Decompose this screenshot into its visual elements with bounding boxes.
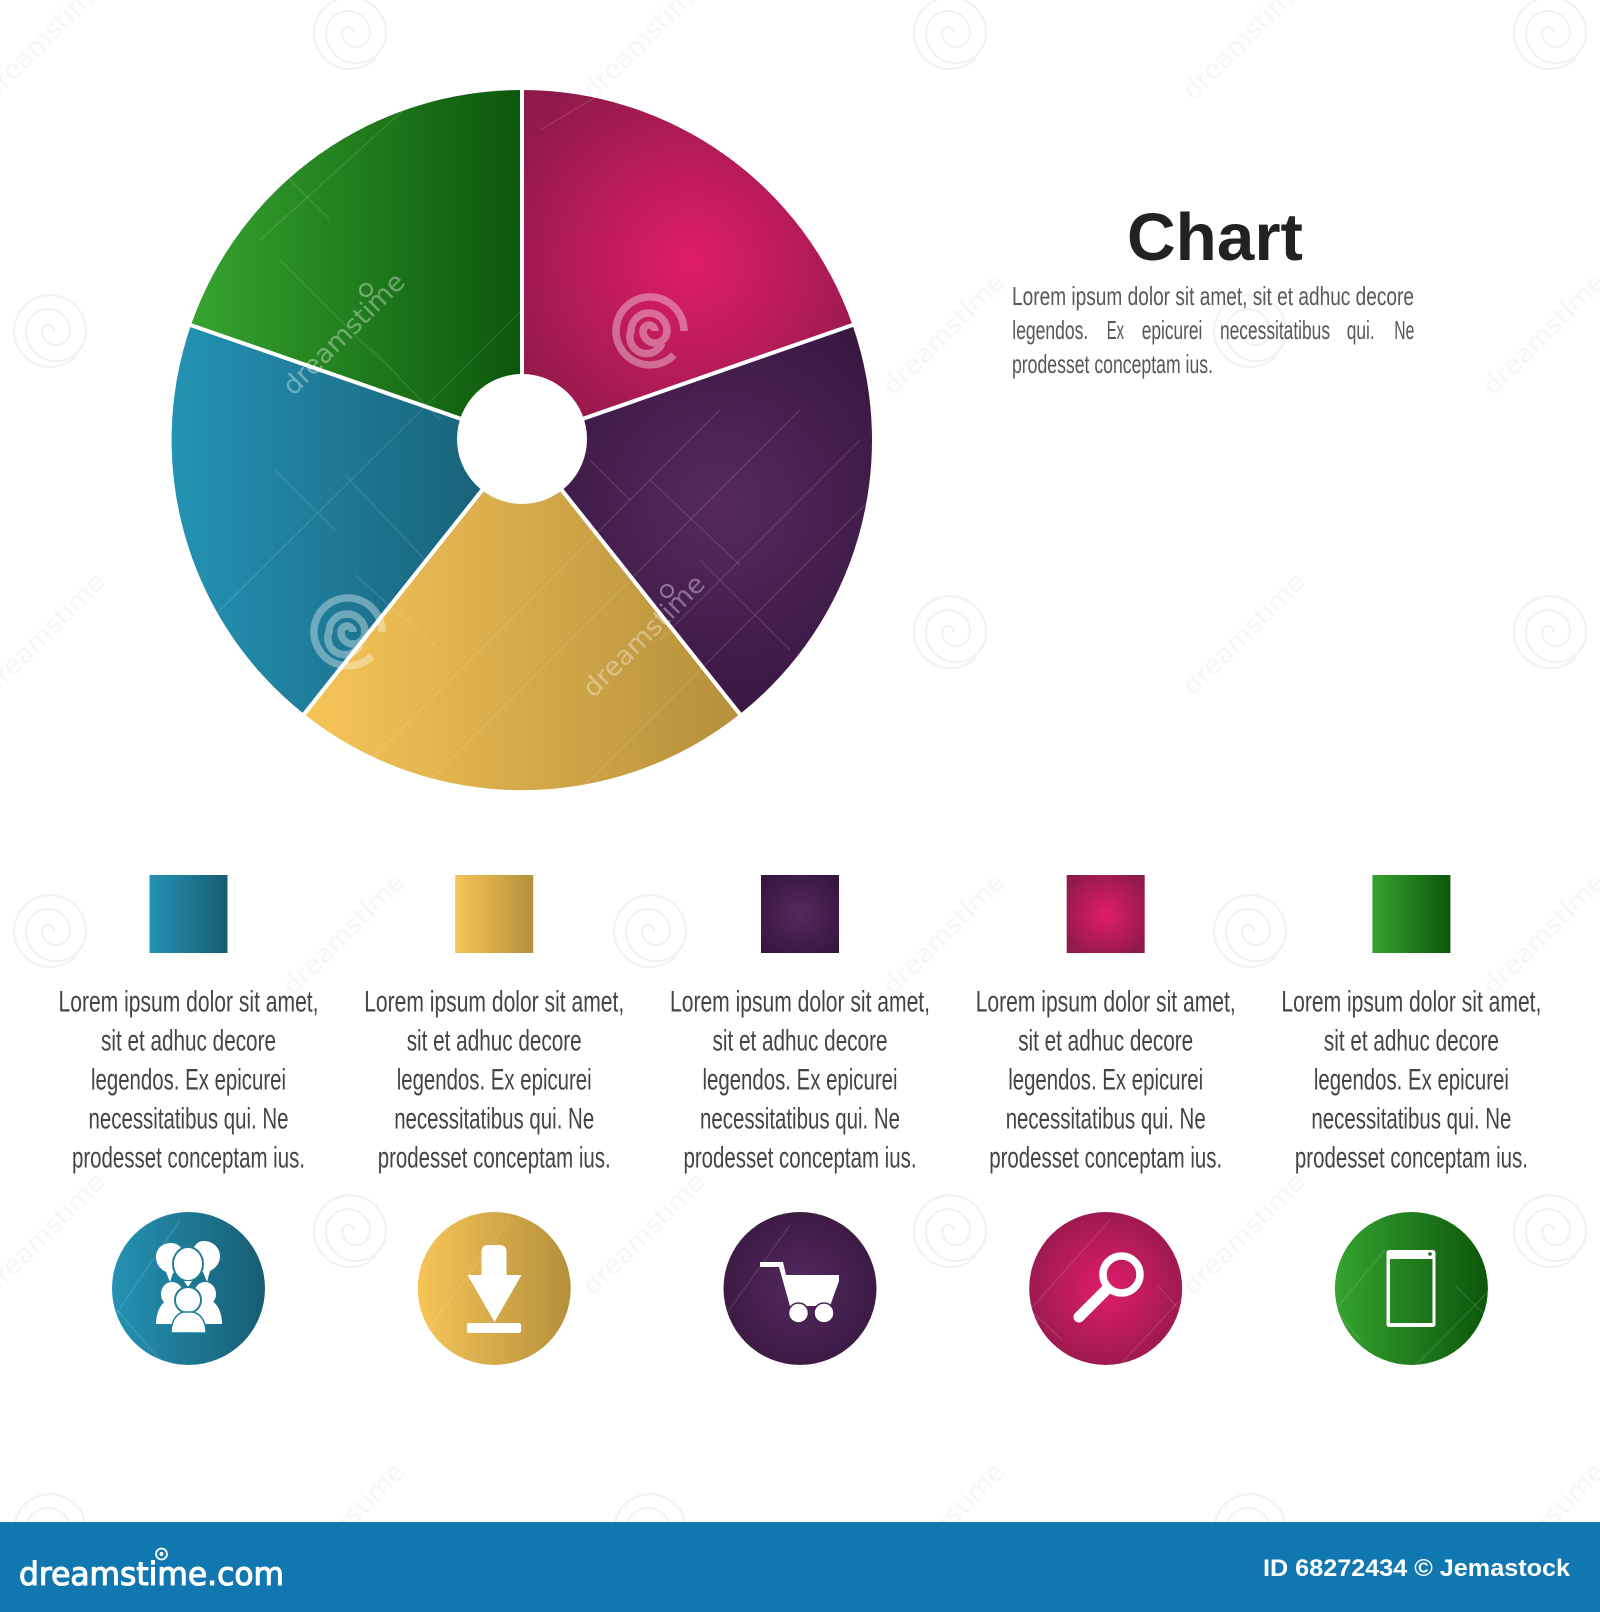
- legend text: legendos. Ex epicurei: [1008, 1064, 1203, 1096]
- background watermark pattern: dreamstime: [1177, 567, 1312, 702]
- legend swatch: [1372, 875, 1450, 953]
- intro text block: Ex: [1107, 315, 1124, 345]
- legend text: sit et adhuc decore: [1324, 1024, 1499, 1058]
- legend text: necessitatibus qui. Ne: [394, 1102, 594, 1136]
- legend text: sit et adhuc decore: [1018, 1024, 1193, 1058]
- legend text: prodesset conceptam ius.: [684, 1142, 916, 1174]
- segment: gold: [304, 440, 740, 790]
- legend text: necessitatibus qui. Ne: [700, 1102, 900, 1136]
- legend text: [364, 986, 624, 1174]
- legend column: purple: [670, 875, 930, 1365]
- legend text: [58, 986, 318, 1174]
- footer logo: dreamstime.com: [19, 1555, 284, 1593]
- legend text: [670, 986, 930, 1174]
- legend text: prodesset conceptam ius.: [378, 1142, 611, 1174]
- center hole: [457, 374, 587, 504]
- segment separators: [189, 88, 854, 716]
- legend text: Lorem ipsum dolor sit amet,: [58, 986, 318, 1018]
- pie watermark overlay: dreamstime: [577, 569, 712, 704]
- intro text block: qui.: [1347, 315, 1375, 345]
- background watermark pattern: dreamstime: [277, 1457, 412, 1592]
- legend text: necessitatibus qui. Ne: [88, 1102, 288, 1136]
- legend text: Lorem ipsum dolor sit amet,: [976, 986, 1236, 1018]
- icon: tablet: [1335, 1212, 1488, 1365]
- background watermark pattern: dreamstime: [877, 267, 1012, 402]
- legend column: pink: [976, 875, 1236, 1365]
- intro text block: Ne: [1394, 315, 1414, 345]
- segment: purple: [522, 325, 872, 714]
- intro text block: Lorem ipsum dolor sit amet, sit et adhuc decore: [1012, 281, 1414, 311]
- background watermark pattern: dreamstime: [577, 1167, 712, 1302]
- intro text block: epicurei: [1142, 315, 1202, 345]
- legend text: necessitatibus qui. Ne: [1006, 1102, 1206, 1136]
- legend text: Lorem ipsum dolor sit amet,: [670, 986, 930, 1018]
- intro text block: [1012, 281, 1414, 379]
- footer image id and author: ID 68272434 © Jemastock: [1263, 1555, 1571, 1582]
- title: Chart: [1127, 200, 1303, 275]
- icon: people with speech bubbles: [112, 1212, 265, 1365]
- legend column: green: [1281, 875, 1541, 1365]
- background watermark pattern: dreamstime: [1177, 1167, 1312, 1302]
- intro text block: prodesset conceptam ius.: [1012, 349, 1213, 379]
- pie watermark overlay: dreamstime: [277, 267, 412, 402]
- legend text: prodesset conceptam ius.: [989, 1142, 1222, 1174]
- segment: green: [191, 90, 522, 440]
- legend text: [976, 986, 1236, 1174]
- segment: teal: [172, 325, 522, 714]
- legend text: Lorem ipsum dolor sit amet,: [364, 986, 624, 1018]
- background watermark pattern: dreamstime: [277, 867, 412, 1002]
- legend text: legendos. Ex epicurei: [702, 1064, 898, 1096]
- legend text: necessitatibus qui. Ne: [1311, 1102, 1511, 1136]
- legend column: gold: [364, 875, 624, 1365]
- icon: shopping cart: [724, 1212, 876, 1365]
- legend text: legendos. Ex epicurei: [91, 1064, 286, 1096]
- icon: magnifying glass: [1029, 1212, 1182, 1365]
- legend text: legendos. Ex epicurei: [1314, 1064, 1509, 1096]
- legend text: sit et adhuc decore: [101, 1024, 276, 1058]
- legend swatch: [761, 875, 839, 953]
- intro text block: necessitatibus: [1220, 315, 1330, 345]
- background watermark pattern: dreamstime: [877, 867, 1012, 1002]
- legend text: prodesset conceptam ius.: [72, 1142, 305, 1174]
- legend text: [1281, 986, 1541, 1174]
- thin watermark lattice lines: [112, 0, 1490, 1365]
- legend swatch: [150, 875, 228, 953]
- legend text: legendos. Ex epicurei: [397, 1064, 592, 1096]
- legend text: sit et adhuc decore: [712, 1024, 888, 1058]
- icon: download arrow: [418, 1212, 571, 1365]
- legend text: sit et adhuc decore: [407, 1024, 582, 1058]
- footer banner: [0, 1522, 1600, 1612]
- legend column: teal: [58, 875, 318, 1365]
- legend swatch: [1067, 875, 1145, 953]
- intro text block: legendos.: [1012, 315, 1088, 345]
- segment: pink: [522, 90, 852, 440]
- pie watermark overlay: [277, 267, 712, 704]
- donut pie chart: [172, 88, 872, 790]
- background watermark pattern: dreamstime: [877, 1457, 1012, 1592]
- legend swatch: [455, 875, 533, 953]
